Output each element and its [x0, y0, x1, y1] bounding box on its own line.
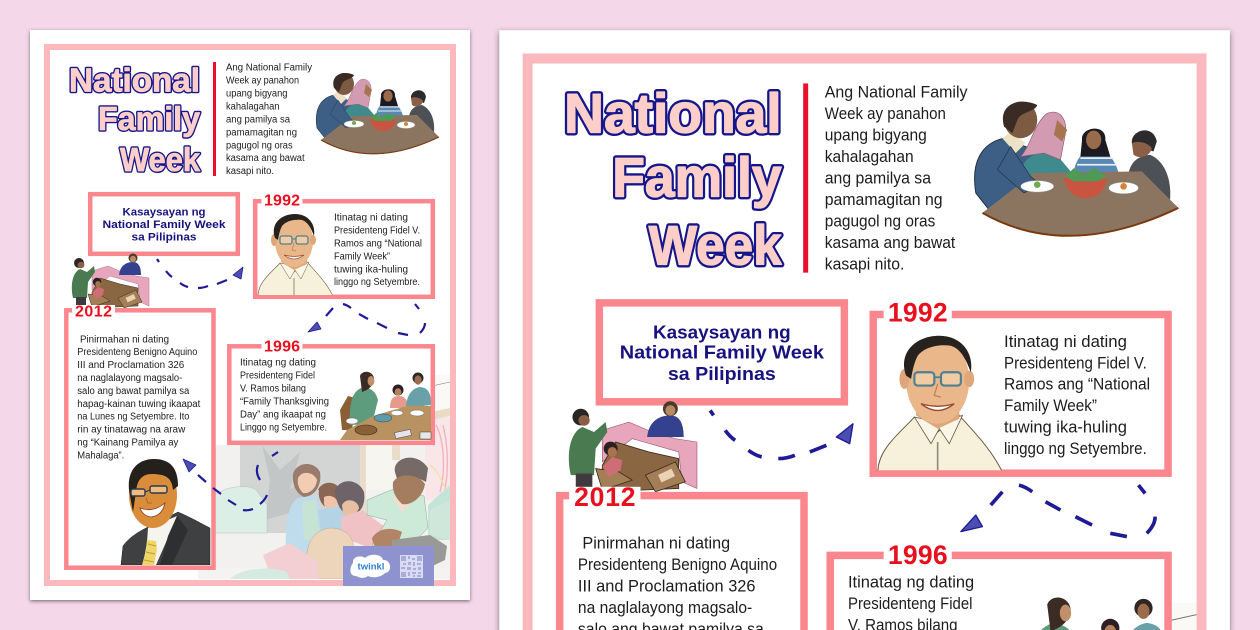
- intro text: pamamagitan ng: [825, 190, 943, 209]
- intro text: kasama ang bawat: [226, 153, 305, 164]
- panel: 2012: Presidenteng Benigno Aquino: [77, 347, 198, 358]
- panel: 1996: “Family Thanksgiving: [240, 397, 329, 408]
- intro text: kasama ang bawat: [825, 233, 956, 252]
- panel: history heading: sa Pilipinas: [668, 363, 776, 384]
- intro text: Week ay panahon: [825, 104, 946, 123]
- panel: 1992: Itinatag ni dating: [1004, 332, 1127, 351]
- panel: 1996: Presidenteng Fidel: [240, 371, 315, 382]
- panel: history heading: Kasaysayan ng: [122, 207, 206, 219]
- panel: 1992: Ramos ang “National: [334, 238, 422, 250]
- panel: 2012: na Lunes ng Setyembre. Ito: [77, 412, 190, 423]
- intro text: Ang National Family: [226, 62, 312, 74]
- arrow: heading to 1992: [157, 259, 243, 288]
- panel: 1996: V. Ramos bilang: [240, 384, 306, 395]
- intro text: Ang National Family: [825, 83, 968, 102]
- arrow: heading to 1992: [710, 410, 853, 459]
- title: National: [69, 62, 200, 100]
- illustration: family meal: [975, 102, 1178, 236]
- logo: twinkl and QR code: twinkl: [358, 562, 384, 572]
- title: Family: [612, 146, 782, 208]
- panel: history heading: [599, 303, 844, 402]
- panel: 2012: III and Proclamation 326: [77, 360, 185, 371]
- intro text: [825, 83, 968, 274]
- panel: 2012: Pinirmahan ni dating: [582, 534, 730, 553]
- panel: 1992: linggo ng Setyembre.: [1004, 439, 1147, 458]
- arrow: 1992 to 1996: [961, 485, 1155, 537]
- intro text: kasapi nito.: [226, 166, 274, 177]
- illustration: moving boxes: [72, 254, 149, 308]
- panel: 1996: Itinatag ng dating: [848, 573, 974, 592]
- intro text: [226, 62, 312, 177]
- panel: 1992: 1992: [264, 192, 300, 210]
- panel: poster page preview (left): [30, 30, 470, 600]
- panel: history heading: Kasaysayan ng: [653, 322, 791, 343]
- panel: 1992: tuwing ika-huling: [1004, 418, 1127, 437]
- panel: 2012: hapag-kainan tuwing ikaapat: [77, 399, 201, 410]
- title: [564, 82, 782, 276]
- panel: history heading: National Family Week: [102, 219, 226, 231]
- panel: 2012: Pinirmahan ni dating: [80, 334, 169, 345]
- panel: 1996: Presidenteng Fidel: [848, 594, 973, 613]
- panel: 1992: Presidenteng Fidel V.: [334, 226, 420, 237]
- intro text: pagugol ng oras: [825, 212, 935, 231]
- logo: twinkl and QR code: [343, 546, 434, 586]
- panel: 1992: Ramos ang “National: [1004, 375, 1150, 394]
- panel: 2012: ng “Kainang Pamilya ay: [77, 438, 178, 448]
- intro text: pagugol ng oras: [226, 140, 293, 151]
- title: Family: [98, 101, 200, 138]
- panel: 1992: [873, 298, 1168, 473]
- panel: 2012: salo ang bawat pamilya sa: [77, 386, 190, 397]
- panel: history heading: [90, 194, 238, 254]
- panel: 1992: tuwing ika-huling: [334, 264, 408, 275]
- panel: 2012: 2012: [75, 304, 112, 320]
- panel: 2012: rin ay tinatawag na araw: [77, 425, 186, 436]
- panel: 1992: [255, 192, 433, 297]
- panel: 2012: 2012: [574, 482, 636, 512]
- panel: 1992: Itinatag ni dating: [334, 213, 408, 224]
- title: National: [69, 62, 200, 100]
- title: [69, 62, 200, 179]
- title: Week: [649, 214, 782, 276]
- title: Week: [120, 142, 200, 179]
- intro text: upang bigyang: [825, 126, 927, 145]
- panel: 1996: Linggo ng Setyembre.: [240, 423, 327, 434]
- panel: 1992: Family Week”: [1004, 396, 1097, 415]
- panel: 1992: 1992: [888, 298, 948, 328]
- panel: history heading: National Family Week: [620, 342, 825, 363]
- illustration: background photo: [1172, 603, 1196, 630]
- panel: 1996: 1996: [264, 338, 300, 356]
- panel: 1996: Itinatag ng dating: [240, 358, 316, 369]
- arrow: 1996 to 2012: [183, 452, 278, 510]
- panel: 2012: Mahalaga”.: [77, 450, 124, 461]
- intro text: kahalagahan: [825, 147, 914, 166]
- panel: 1992: Family Week”: [334, 251, 390, 262]
- intro text: kahalagahan: [226, 101, 280, 112]
- panel: 1992: linggo ng Setyembre.: [334, 277, 420, 288]
- panel: 2012: [560, 482, 804, 630]
- panel: 2012: na naglalayong magsalo-: [77, 373, 182, 384]
- panel: 2012: na naglalayong magsalo-: [578, 598, 752, 617]
- title: Family: [98, 101, 200, 138]
- panel: 1996: [229, 338, 433, 443]
- panel: 2012: Presidenteng Benigno Aquino: [578, 555, 777, 574]
- intro text: ang pamilya sa: [825, 169, 932, 188]
- panel: 1996: 1996: [888, 540, 948, 570]
- illustration: family with dog background: [198, 375, 450, 580]
- panel: poster page enlarged (right): [499, 30, 1230, 630]
- panel: 1996: [830, 540, 1168, 630]
- title: Week: [649, 214, 782, 276]
- title: Family: [612, 146, 782, 208]
- panel: history heading: sa Pilipinas: [132, 232, 196, 244]
- intro text: pamamagitan ng: [226, 127, 297, 138]
- panel: 2012: [66, 304, 214, 568]
- illustration: family meal: [316, 73, 439, 154]
- illustration: moving boxes: [569, 401, 697, 492]
- title: Week: [120, 142, 200, 179]
- intro text: upang bigyang: [226, 88, 288, 99]
- panel: 1996: Day” ang ikaapat ng: [240, 410, 326, 421]
- panel: 1992: Presidenteng Fidel V.: [1004, 353, 1147, 372]
- intro text: kasapi nito.: [825, 255, 904, 274]
- arrow: 1992 to 1996: [308, 304, 425, 335]
- panel: 2012: III and Proclamation 326: [578, 577, 756, 596]
- title: National: [564, 82, 782, 144]
- intro text: Week ay panahon: [226, 76, 299, 86]
- intro text: ang pamilya sa: [226, 114, 290, 125]
- title: National: [564, 82, 782, 144]
